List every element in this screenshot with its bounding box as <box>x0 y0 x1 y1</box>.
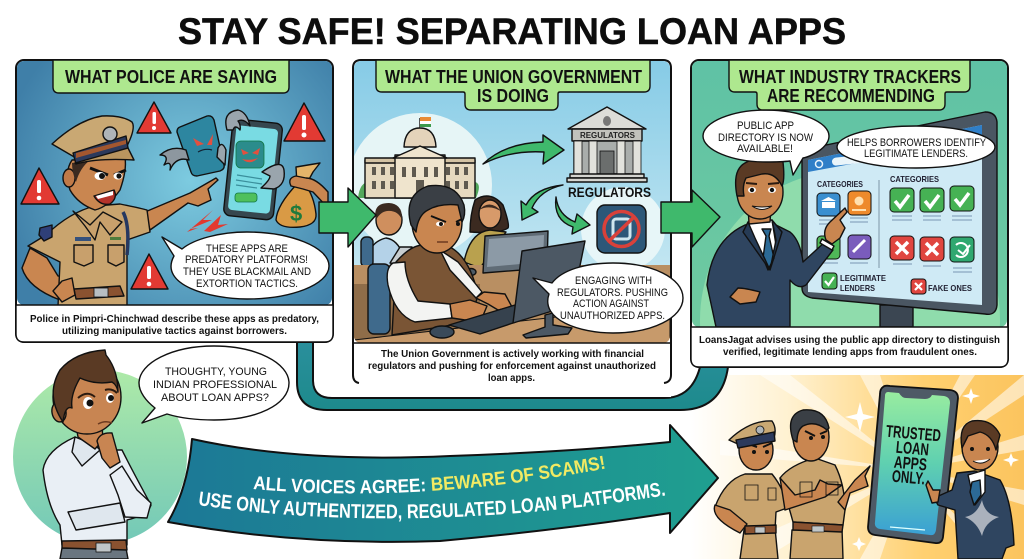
heading tab: government: WHAT THE UNION GOVERNMENT <box>385 67 642 87</box>
speech bubble: police <box>162 232 329 299</box>
caption: government: The Union Government is actively working with financial <box>381 348 644 360</box>
sunburst background <box>690 375 1024 559</box>
speech bubble: government: UNAUTHORIZED APPS. <box>560 310 665 322</box>
watermark: sparkle <box>965 500 999 536</box>
big teal arrow: all voices agree: ALL VOICES AGREE: BEWARE OF SCAMS! <box>254 456 605 494</box>
caption: police <box>16 305 333 342</box>
icon: money bag with hand <box>276 163 328 227</box>
caption: trackers <box>691 327 1008 367</box>
green circle background <box>12 369 188 545</box>
caption: police: utilizing manipulative tactics against borrowers. <box>62 325 287 337</box>
icon: regulators building <box>567 107 647 182</box>
arrow: police to government <box>319 188 376 247</box>
speech bubble: thoughtful question: INDIAN PROFESSIONAL <box>153 379 277 391</box>
icon: regulators building: REGULATORS <box>580 131 636 140</box>
arrows: green flow between government, regulators and blocked apps <box>483 135 590 234</box>
speech bubble: government: REGULATORS. PUSHING <box>557 287 668 299</box>
character: thinking professional <box>43 350 151 559</box>
speech bubble: helps borrowers: HELPS BORROWERS IDENTIFY <box>847 137 987 149</box>
icon: warning triangles <box>21 102 325 289</box>
character: policeman with cap <box>714 421 787 559</box>
speech bubble: thoughtful question: ABOUT LOAN APPS? <box>161 392 269 404</box>
speech bubble: government: ENGAGING WITH <box>575 275 652 287</box>
big teal arrow: all voices agree: USE ONLY AUTHENTIZED, REGULATED LOAN PLATFORMS. <box>200 482 665 522</box>
arrow message line 2 <box>198 495 668 518</box>
speech bubble: public app directory: AVAILABLE! <box>737 143 793 155</box>
character: second officer pointing <box>780 410 870 559</box>
icon: sparkles <box>845 388 1019 551</box>
heading tab: trackers <box>729 60 970 110</box>
icon: directory monitor <box>802 112 997 327</box>
speech bubble: police: PREDATORY PLATFORMS! <box>185 254 308 266</box>
connector: teal loop between panels <box>297 342 728 410</box>
character: suited tracker pointing at phone <box>926 421 1014 559</box>
speech bubble: thoughtful question: THOUGHTY, YOUNG <box>165 366 267 378</box>
speech bubble: thoughtful question <box>139 346 289 423</box>
label: regulators: REGULATORS <box>568 185 651 200</box>
big teal arrow: all voices agree <box>167 424 719 543</box>
caption: trackers: verified, legitimate lending apps from fraudulent ones. <box>723 346 977 358</box>
legend: fake ones: FAKE ONES <box>928 283 972 293</box>
speech bubble: police: EXTORTION TACTICS. <box>196 278 298 290</box>
character: angry policeman <box>22 116 218 306</box>
speech bubble: police: THEY USE BLACKMAIL AND <box>183 266 311 278</box>
caption: government <box>353 343 671 384</box>
character: colleague woman <box>464 196 508 268</box>
heading tab: police: WHAT POLICE ARE SAYING <box>65 67 277 87</box>
bottom right: trusted apps scene <box>690 375 1024 559</box>
heading tab: police <box>53 60 289 93</box>
icon: front computer monitor <box>513 241 585 338</box>
icon: directory monitor: CATEGORIES <box>817 179 863 189</box>
icon: trusted loan apps phone: TRUSTED <box>885 422 942 445</box>
caption: government: regulators and pushing for enforcement against unauthorized <box>368 360 656 372</box>
speech bubble: police: THESE APPS ARE <box>206 243 288 255</box>
speech bubble: helps borrowers <box>837 126 995 168</box>
icon: money bag with hand: $ <box>290 201 302 226</box>
speech bubble: helps borrowers: LEGITIMATE LENDERS. <box>864 148 968 160</box>
speech bubble: public app directory <box>703 110 829 175</box>
bottom left: thoughtful professional <box>12 346 289 559</box>
character: colleague man <box>361 203 412 267</box>
heading tab: government: IS DOING <box>477 86 549 106</box>
speech bubble: public app directory: PUBLIC APP <box>737 120 794 132</box>
heading tab: government <box>376 60 650 110</box>
icon: rear computer monitor <box>466 231 548 276</box>
panel: what the union government is doing <box>348 60 683 397</box>
police scene background <box>17 61 332 305</box>
icon: keyboard and mouse <box>430 305 516 338</box>
icon: blocked app <box>597 205 646 253</box>
caption: government: loan apps. <box>488 372 535 384</box>
speech bubble: government <box>533 263 683 333</box>
arrow message line 1 <box>253 468 608 493</box>
title: STAY SAFE! SEPARATING LOAN APPS <box>178 11 846 52</box>
icon: large phone with claws <box>217 110 284 220</box>
heading tab: trackers: ARE RECOMMENDING <box>767 86 935 106</box>
arrow: government to trackers <box>661 190 720 247</box>
legend: legitimate lenders: LEGITIMATE <box>840 273 886 283</box>
caption: police: Police in Pimpri-Chinchwad describe these apps as predatory, <box>30 313 319 325</box>
government scene background <box>354 61 670 265</box>
icon: trusted loan apps phone <box>868 386 958 543</box>
icon: small evil phone <box>160 116 224 176</box>
icon: red spark lines <box>187 210 228 232</box>
character: main government officer at keyboard <box>368 185 512 335</box>
speech bubble: public app directory: DIRECTORY IS NOW <box>718 132 814 144</box>
icon: directory monitor: CATEGORIES <box>890 174 939 184</box>
speech bubble: government: ACTION AGAINST <box>573 298 649 310</box>
legend: fake ones <box>911 279 972 294</box>
icon: trusted loan apps phone: ONLY. <box>891 467 926 488</box>
icon: parliament building <box>358 117 479 198</box>
heading tab: trackers: WHAT INDUSTRY TRACKERS <box>739 67 961 87</box>
icon: trusted loan apps phone: LOAN <box>895 438 930 459</box>
character: industry tracker in suit <box>707 157 847 327</box>
icon: trusted loan apps phone: APPS <box>893 453 928 474</box>
tracker scene background <box>692 61 1007 326</box>
caption: trackers: LoansJagat advises using the public app directory to distinguish <box>699 334 1000 346</box>
panel: what police are saying <box>16 60 333 342</box>
office desk <box>354 265 670 343</box>
legend: legitimate lenders <box>822 273 886 293</box>
panel: what industry trackers are recommending <box>690 59 1009 368</box>
legend: legitimate lenders: LENDERS <box>840 283 875 293</box>
